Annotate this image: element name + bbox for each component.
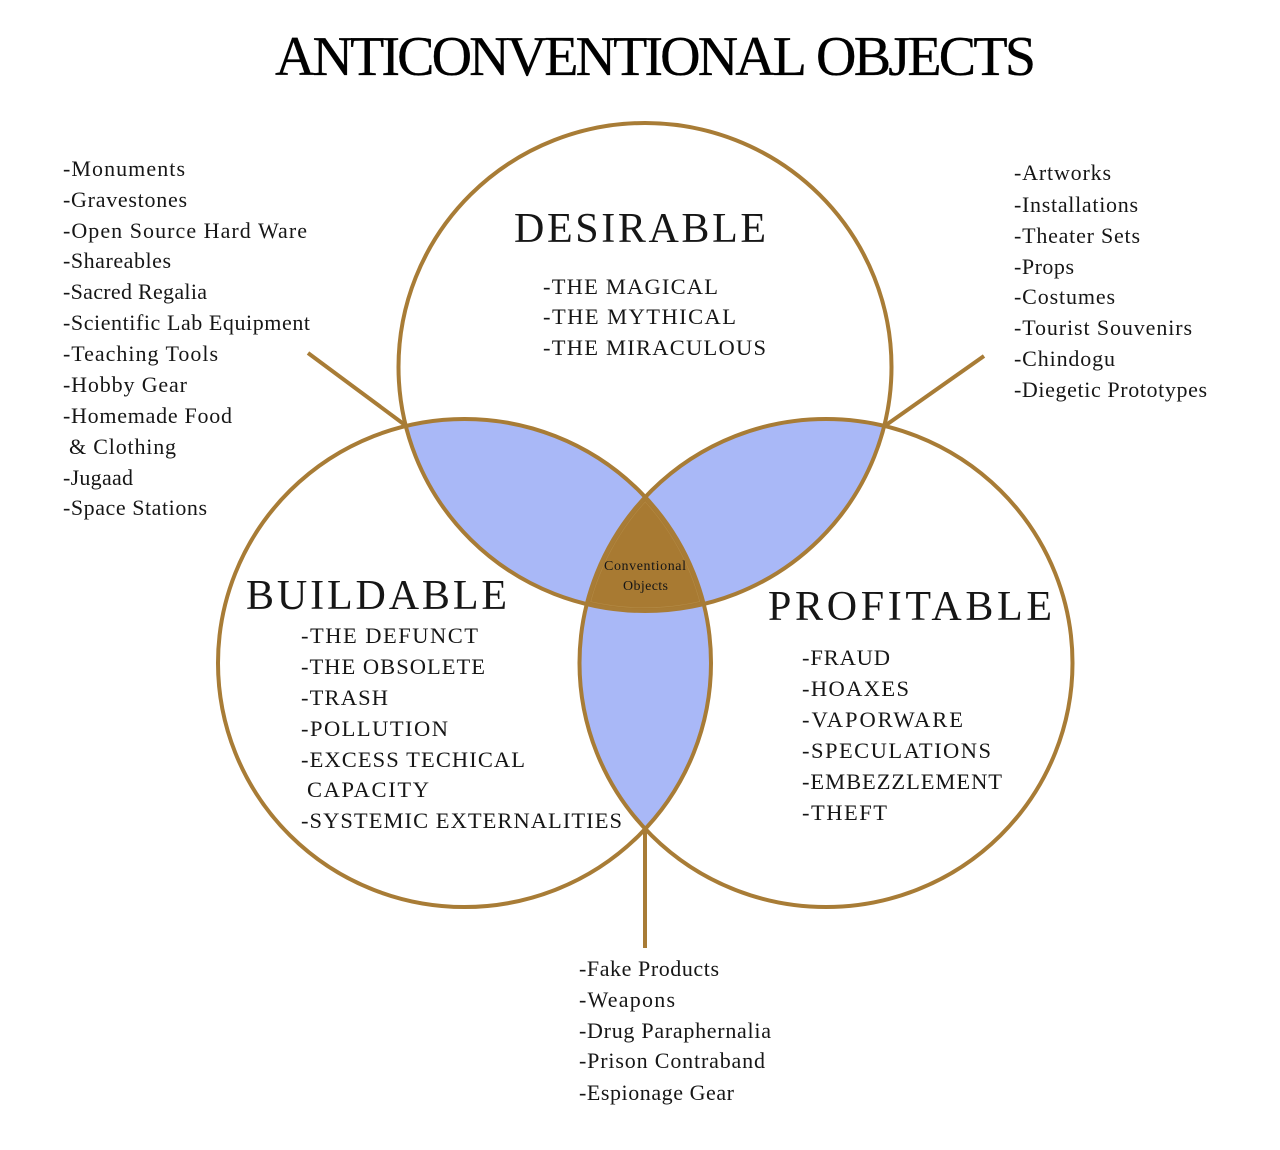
list: buildable and profitable objects: -Fake Products — [579, 956, 719, 981]
list: desirable and profitable objects: -Diegetic Prototypes — [1014, 377, 1207, 402]
list: desirable and buildable objects: & Clothing — [69, 434, 176, 459]
title: OBJECTS — [816, 26, 1036, 88]
list: buildable: -THE DEFUNCT — [301, 623, 478, 648]
list: desirable and buildable objects: -Homemade Food — [63, 403, 232, 428]
list: buildable: -POLLUTION — [301, 716, 448, 741]
list: profitable: -FRAUD — [802, 645, 890, 670]
list: desirable and buildable objects: -Shareables — [63, 248, 171, 273]
list: buildable and profitable objects: -Prison Contraband — [579, 1048, 765, 1073]
title — [275, 26, 1036, 88]
list: desirable: -THE MYTHICAL — [543, 304, 736, 329]
list: desirable and buildable objects: -Gravestones — [63, 187, 187, 212]
connector: left list — [308, 353, 405, 425]
list: desirable and profitable objects: -Artworks — [1014, 160, 1111, 185]
list: desirable and profitable objects: -Props — [1014, 254, 1074, 279]
label: conventional objects: Objects — [623, 579, 668, 594]
list: profitable: -EMBEZZLEMENT — [802, 769, 1002, 794]
overlap: conventional objects — [589, 500, 702, 609]
list: buildable and profitable objects — [579, 956, 771, 1105]
list: buildable: -THE OBSOLETE — [301, 654, 485, 679]
list: buildable and profitable objects: -Drug Paraphernalia — [579, 1018, 771, 1043]
list: desirable and profitable objects — [1014, 160, 1207, 402]
list: profitable — [802, 645, 1002, 825]
list: profitable: -SPECULATIONS — [802, 738, 991, 763]
list: desirable and buildable objects: -Jugaad — [63, 465, 133, 490]
overlap: desirable and buildable — [408, 421, 642, 602]
list: buildable — [301, 623, 622, 833]
connector: bottom list — [643, 828, 647, 948]
heading: profitable: PROFITABLE — [768, 584, 1052, 630]
list: desirable and profitable objects: -Installations — [1014, 192, 1138, 217]
connector: right list — [886, 356, 984, 425]
list: desirable and buildable objects: -Teaching Tools — [63, 341, 218, 366]
heading: desirable: DESIRABLE — [514, 206, 766, 252]
list: desirable and buildable objects: -Open Source Hard Ware — [63, 218, 307, 243]
list: desirable and buildable objects: -Scientific Lab Equipment — [63, 310, 310, 335]
overlap: desirable and profitable — [648, 421, 882, 602]
list: desirable: -THE MIRACULOUS — [543, 335, 766, 360]
list: desirable and profitable objects: -Chindogu — [1014, 346, 1115, 371]
list: desirable: -THE MAGICAL — [543, 274, 718, 299]
venn diagram — [218, 123, 1072, 907]
list: buildable: -SYSTEMIC EXTERNALITIES — [301, 808, 622, 833]
list: buildable and profitable objects: -Weapons — [579, 987, 675, 1012]
circle: buildable — [218, 419, 711, 907]
list: desirable and profitable objects: -Costumes — [1014, 284, 1115, 309]
label: conventional objects — [604, 559, 686, 594]
list: buildable: CAPACITY — [307, 777, 429, 802]
list: profitable: -HOAXES — [802, 676, 909, 701]
list: buildable: -TRASH — [301, 685, 388, 710]
inner highlight: conventional objects — [590, 502, 700, 608]
list: profitable: -THEFT — [802, 800, 887, 825]
list: desirable and buildable objects: -Sacred Regalia — [63, 279, 207, 304]
heading: buildable: BUILDABLE — [246, 573, 507, 619]
list: desirable and buildable objects: -Space Stations — [63, 495, 207, 520]
list: desirable and profitable objects: -Theater Sets — [1014, 223, 1140, 248]
list: desirable and buildable objects: -Monuments — [63, 156, 185, 181]
circle: desirable — [398, 123, 892, 611]
list: buildable: -EXCESS TECHICAL — [301, 747, 525, 772]
list: desirable and buildable objects: -Hobby Gear — [63, 372, 188, 397]
list: buildable and profitable objects: -Espionage Gear — [579, 1080, 735, 1105]
title: ANTICONVENTIONAL — [275, 26, 807, 88]
list: desirable and profitable objects: -Tourist Souvenirs — [1014, 315, 1192, 340]
list: desirable and buildable objects — [63, 156, 310, 520]
list: profitable: -VAPORWARE — [802, 707, 963, 732]
list: desirable — [543, 274, 766, 360]
label: conventional objects: Conventional — [604, 559, 686, 574]
overlap: buildable and profitable — [582, 606, 709, 826]
circle: profitable — [580, 419, 1072, 907]
